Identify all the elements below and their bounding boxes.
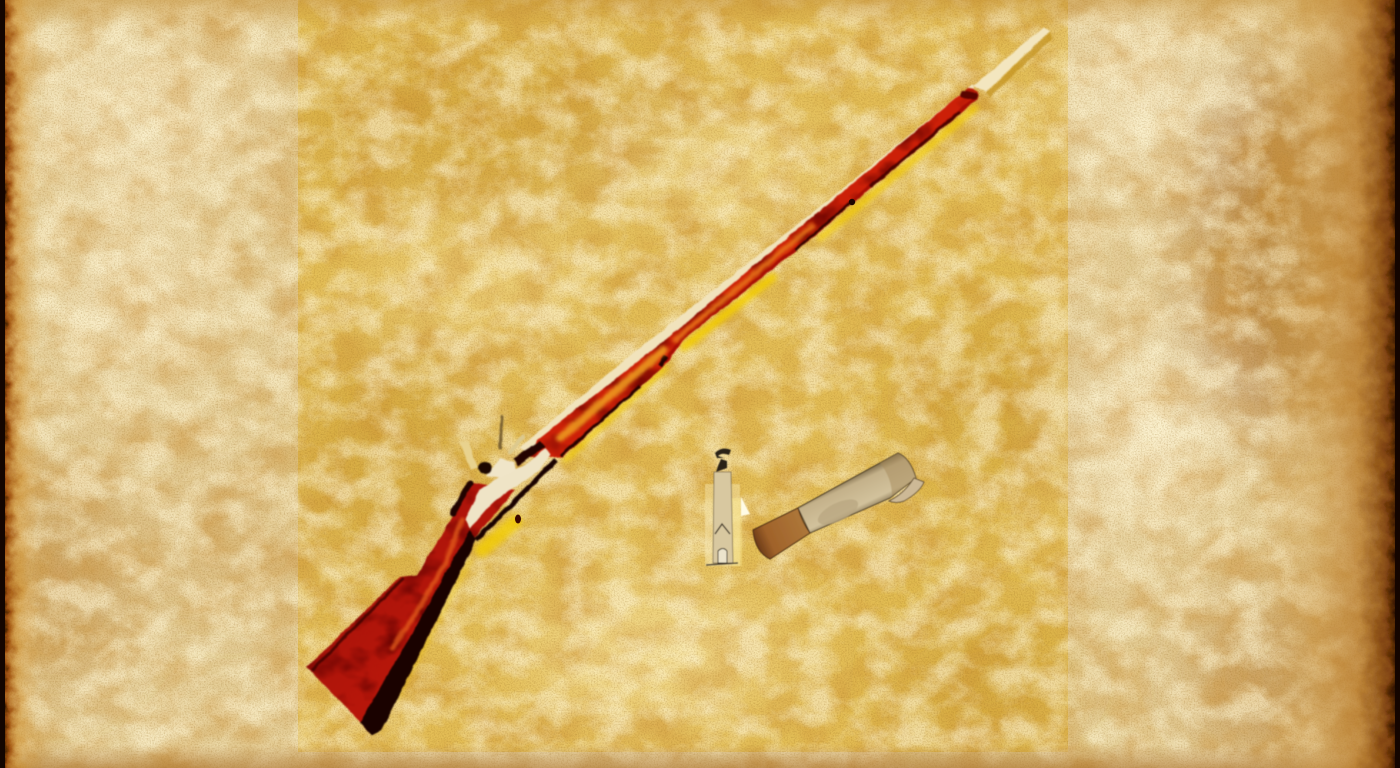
central yellow panel <box>298 0 1068 752</box>
twisted paper flap <box>889 478 924 502</box>
ramrod and muzzle <box>973 27 1050 92</box>
icon: flintlock musket <box>307 27 1052 735</box>
cartridge tube <box>798 453 916 533</box>
powder-stained tip <box>753 508 810 559</box>
fore-end red wood <box>530 88 978 458</box>
column shaft <box>713 472 733 563</box>
lock plate and flint hammer <box>453 483 470 513</box>
fore-end shadow along lower edge <box>665 99 975 362</box>
fore-end cream strip <box>520 84 975 456</box>
stock butt <box>307 482 515 733</box>
icon: monument engraving <box>705 449 750 566</box>
fore-end highlights <box>560 226 812 438</box>
yellow glow under the musket <box>395 108 975 700</box>
column top figure <box>715 449 731 458</box>
paper fold mark <box>814 494 862 530</box>
icon: paper cartridge <box>753 453 924 559</box>
